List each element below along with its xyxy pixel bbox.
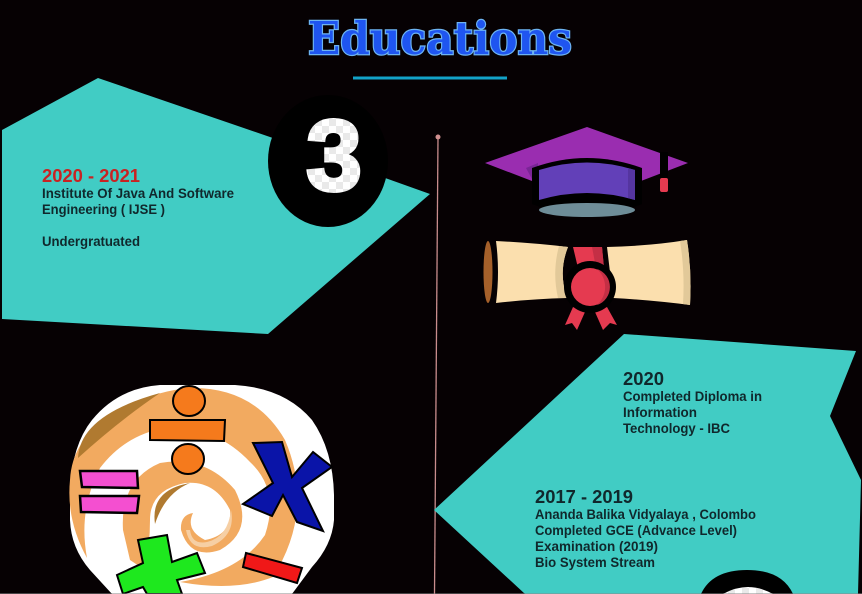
text: 2020 - 2021: Institute Of Java And Software — [42, 185, 234, 201]
symbol: equals — [80, 471, 139, 513]
symbol: division — [150, 386, 225, 474]
text: 2017 - 2019 school: Bio System Stream — [535, 554, 655, 570]
badge: number 3 — [268, 95, 388, 227]
text: 2017 - 2019 school — [535, 487, 756, 570]
text: 2017 - 2019 school: 2017 - 2019 — [535, 487, 633, 507]
text: 2020 - 2021: 2020 - 2021 — [42, 166, 140, 186]
title: Educations — [308, 12, 572, 65]
badge: lower number, cut off by the page edge — [701, 570, 793, 594]
icon: graduation cap — [485, 127, 688, 217]
text: 2020 diploma: 2020 — [623, 369, 664, 389]
swirl shadows — [78, 393, 160, 458]
text: 2017 - 2019 school: Completed GCE (Advance Level) — [535, 522, 737, 538]
text: 2017 - 2019 school: Ananda Balika Vidyalaya , Colombo — [535, 506, 756, 522]
text: 2020 diploma: Completed Diploma in — [623, 388, 762, 404]
icon: diploma scroll — [484, 240, 691, 330]
text: 2020 diploma: Technology - IBC — [623, 420, 730, 436]
badge: number 3: 3 — [306, 100, 362, 212]
text: 2020 - 2021: Undergratuated — [42, 233, 140, 249]
text: 2020 - 2021: Engineering ( IJSE ) — [42, 201, 165, 217]
text: 2020 - 2021 — [42, 166, 234, 249]
swirl bands — [69, 388, 298, 586]
image: math symbols swirl — [69, 385, 334, 594]
symbol: minus — [243, 553, 302, 583]
symbol: plus — [117, 535, 205, 594]
text: 2020 diploma — [623, 369, 762, 436]
panel: diploma and advanced level — [434, 334, 861, 594]
text: 2020 diploma: Information — [623, 404, 697, 420]
timeline line — [434, 134, 440, 594]
text: 2017 - 2019 school: Examination (2019) — [535, 538, 658, 554]
title underline — [353, 76, 507, 80]
panel: IJSE education — [2, 78, 430, 334]
symbol: multiply — [243, 442, 332, 531]
